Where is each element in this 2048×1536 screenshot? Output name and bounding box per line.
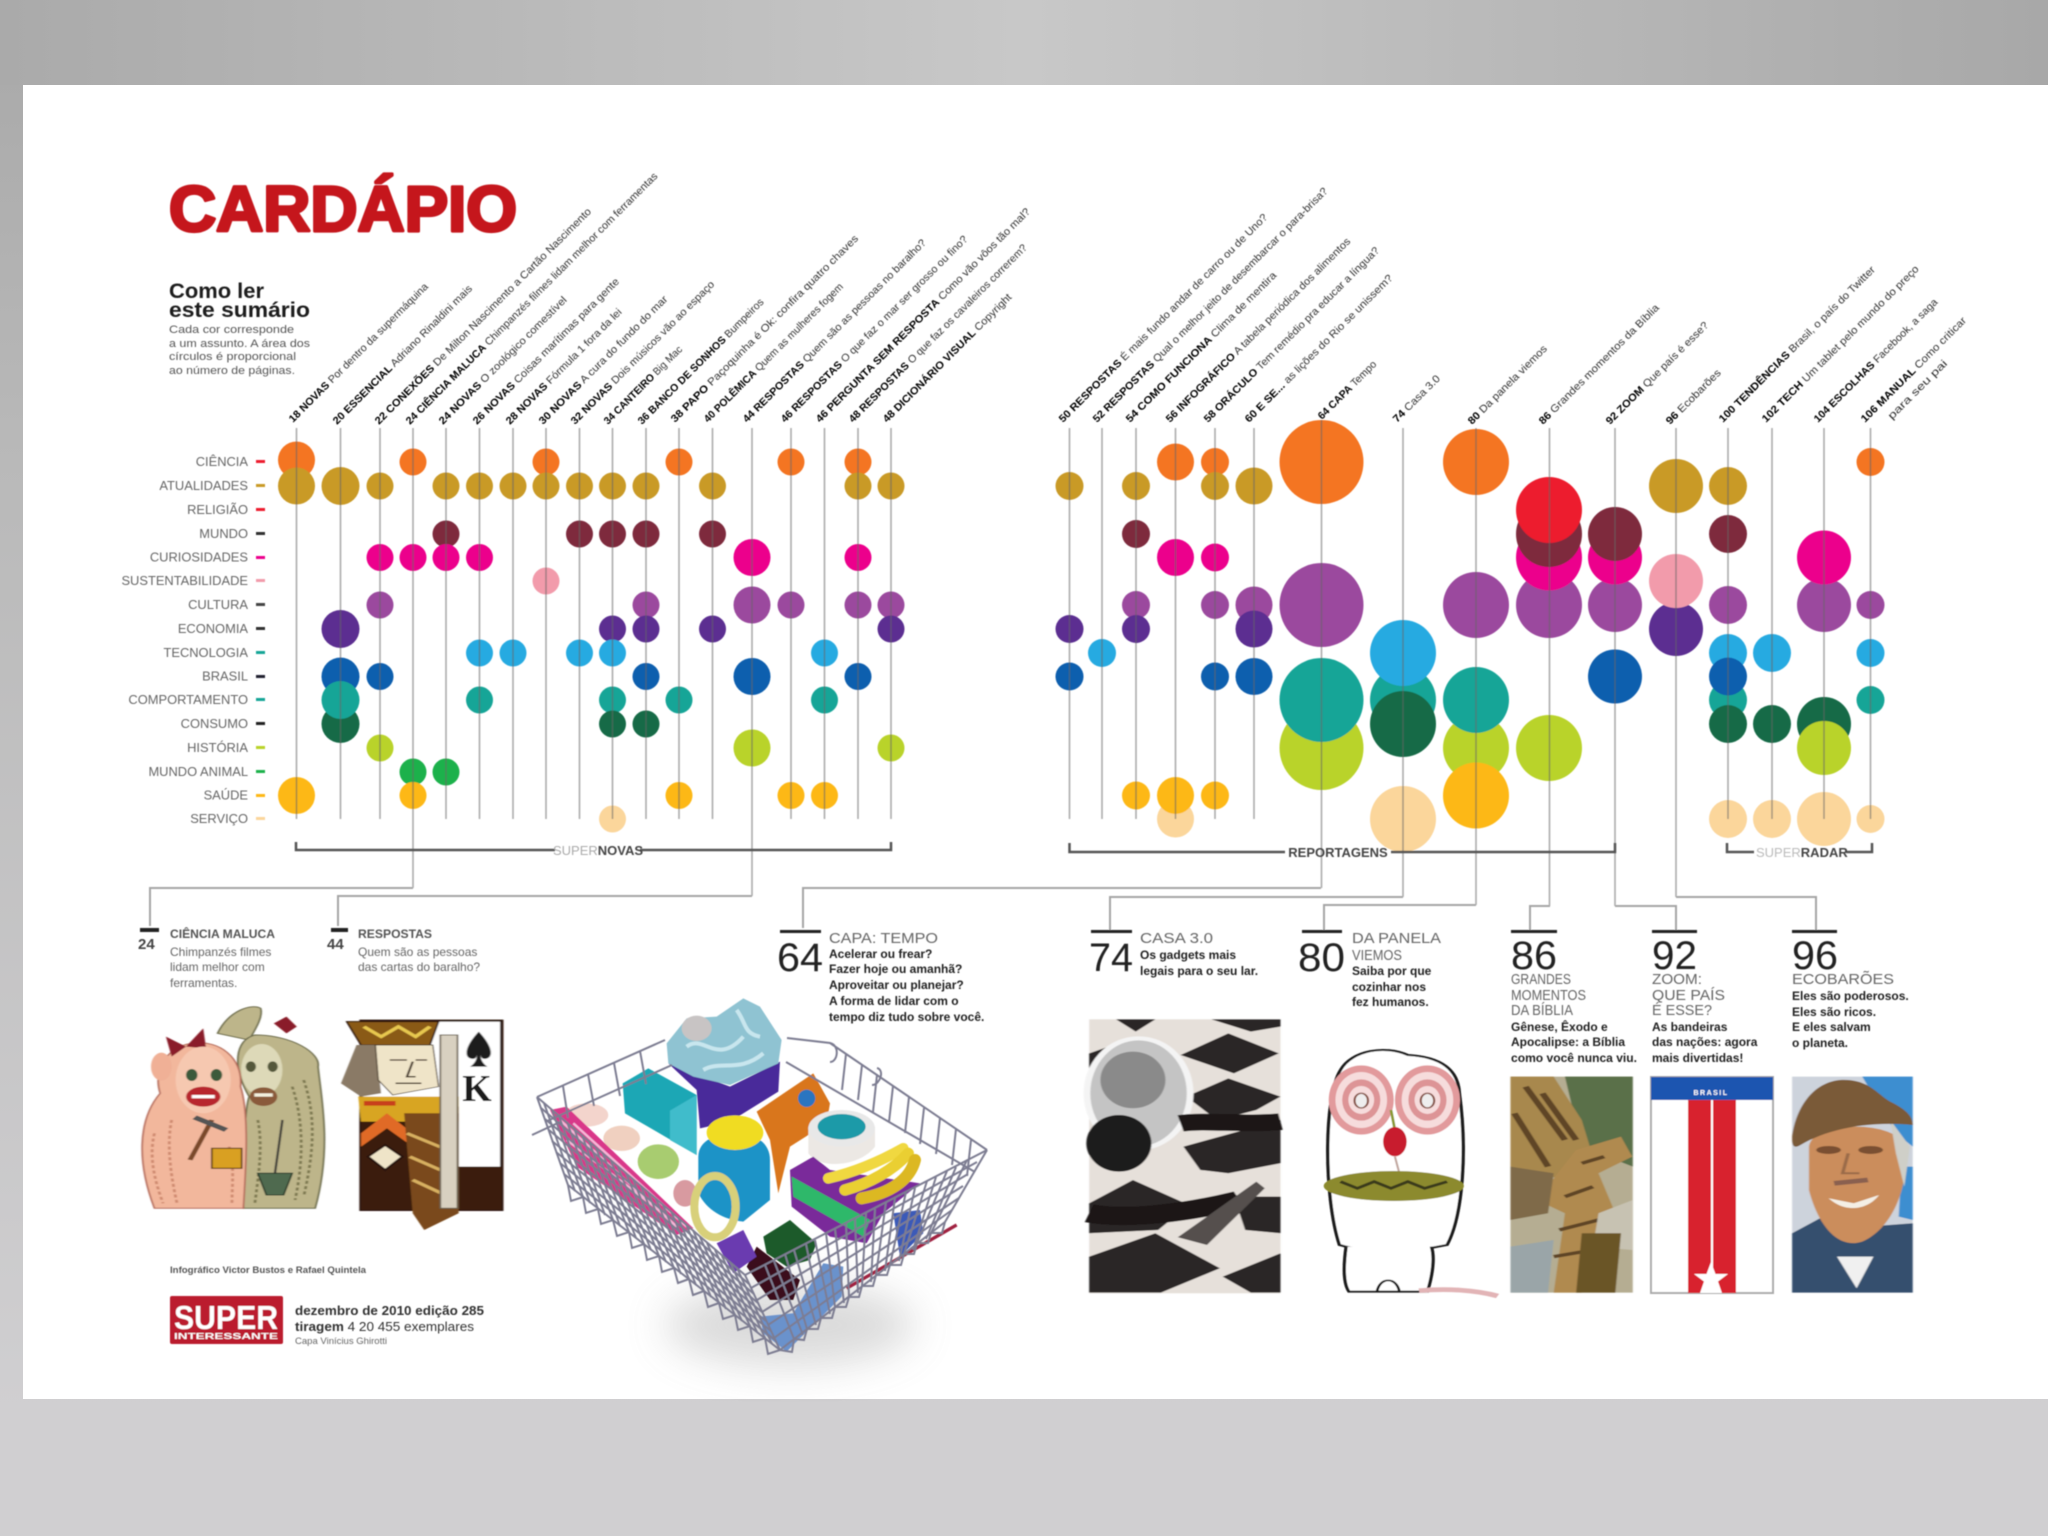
item: 96 ecobarões: 96 xyxy=(1792,934,1838,978)
row labels: subjects: SUSTENTABILIDADE xyxy=(121,573,248,588)
row labels: subjects: MUNDO xyxy=(199,526,248,541)
row labels: subjects: RELIGIÃO xyxy=(187,502,248,517)
column: 106 manual xyxy=(1856,314,1969,833)
column: 80 da panela xyxy=(1443,343,1550,905)
item: 24 ciência maluca xyxy=(138,928,275,990)
edition info: dezembro de 2010 edição 285 xyxy=(295,1304,484,1318)
row labels: subjects: ECONOMIA xyxy=(178,621,248,636)
page content xyxy=(121,170,1969,1367)
item: 74 casa xyxy=(1089,930,1258,980)
column: 46 pergunta sem resposta: 46 PERGUNTA SEM RESPOSTA Como vão vôos tão mal? xyxy=(814,206,1033,425)
column: 38 papo: 38 PAPO Paçoquinha é Ok: confira quatro chaves xyxy=(669,233,861,425)
item: 74 casa: legais para o seu lar. xyxy=(1140,964,1258,978)
item: 92 zoom: As bandeiras xyxy=(1652,1020,1728,1034)
column: 100 tendências: 100 TENDÊNCIAS Brasil, o país do Twitter xyxy=(1716,263,1878,425)
column: 104 escolhas xyxy=(1797,296,1940,846)
item: 86 bíblia xyxy=(1511,930,1637,1065)
column: 36 banco de sonhos xyxy=(632,296,766,819)
item: 86 bíblia: DA BÍBLIA xyxy=(1511,1002,1573,1019)
item: 92 zoom: É ESSE? xyxy=(1652,1002,1712,1019)
legend: how to read: Como ler xyxy=(169,280,264,303)
row labels: subjects: TECNOLOGIA xyxy=(163,645,248,660)
item: 96 ecobarões: ECOBARÕES xyxy=(1792,971,1894,988)
column: 48 dicionário visual: 48 DICIONÁRIO VISUAL Copyright xyxy=(880,291,1014,425)
column: 26 novas: 26 NOVAS Coisas marítimas para gente xyxy=(471,276,622,427)
item: 74 casa: Os gadgets mais xyxy=(1140,948,1236,962)
column: 22 conexões xyxy=(366,205,594,819)
item: 86 bíblia: Apocalipse: a Bíblia xyxy=(1511,1035,1625,1049)
column: 18 novas xyxy=(278,281,431,819)
item: 44 respostas: RESPOSTAS xyxy=(358,929,432,941)
column: 102 tech xyxy=(1753,263,1922,838)
item: 64 capa tempo: tempo diz tudo sobre você. xyxy=(829,1010,984,1024)
column: 102 tech: 102 TECH Um tablet pelo mundo do preço xyxy=(1760,263,1922,425)
column: 56 infográfico xyxy=(1157,235,1353,837)
illustration: shopping basket xyxy=(532,998,987,1367)
legend: how to read: Cada cor corresponde xyxy=(169,324,294,336)
column: 46 pergunta sem resposta xyxy=(811,206,1033,819)
illustration: monkeys xyxy=(142,1007,324,1208)
logo: super interessante: INTERESSANTE xyxy=(174,1332,279,1341)
column: 92 zoom xyxy=(1588,320,1711,906)
column: 48 respostas xyxy=(844,242,1030,819)
column: 80 da panela: 80 Da panela viemos xyxy=(1466,343,1550,427)
item: 24 ciência maluca: Chimpanzés filmes xyxy=(170,945,271,959)
item: 44 respostas xyxy=(327,928,480,974)
item: 96 ecobarões: E eles salvam xyxy=(1792,1020,1871,1034)
column: 60 e se: 60 E SE... as lições do Rio se unissem? xyxy=(1243,272,1395,425)
row labels: subjects: SERVIÇO xyxy=(190,811,248,826)
row labels: subjects: HISTÓRIA xyxy=(187,740,248,755)
bracket: reportagens: REPORTAGENS xyxy=(1288,845,1388,860)
column: 18 novas: 18 NOVAS Por dentro da supermáquina xyxy=(287,281,431,425)
row labels: subjects: CURIOSIDADES xyxy=(150,550,248,564)
row labels: subjects: CIÊNCIA xyxy=(196,454,248,469)
item: 92 zoom xyxy=(1652,930,1758,1065)
illustration: flag: BRASIL xyxy=(1693,1090,1729,1097)
column: 58 oráculo xyxy=(1201,244,1382,819)
item: 24 ciência maluca: lidam melhor com xyxy=(170,960,265,974)
row labels: subjects: MUNDO ANIMAL xyxy=(148,764,248,779)
column: 34 canteiro xyxy=(599,344,685,832)
column: 28 novas: 28 NOVAS Fórmula 1 fora da lei xyxy=(504,306,625,427)
column: 92 zoom: 92 ZOOM Que país é esse? xyxy=(1604,320,1711,427)
column: 60 e se xyxy=(1236,272,1395,819)
item: 24 ciência maluca: CIÊNCIA MALUCA xyxy=(170,928,275,941)
column: 106 manual: para seu pai xyxy=(1886,358,1950,422)
item: 80 da panela xyxy=(1298,930,1441,1009)
item: 92 zoom: mais divertidas! xyxy=(1652,1051,1743,1065)
basket mesh xyxy=(532,1038,987,1354)
item: 44 respostas: 44 xyxy=(327,936,344,953)
column: 54 como funciona: 54 COMO FUNCIONA Clima de mentira xyxy=(1124,269,1279,425)
column: 44 respostas: 44 RESPOSTAS Quem são as pessoas no baralho? xyxy=(741,237,929,425)
logo: super interessante: SUPER xyxy=(174,1299,278,1336)
column: 52 respostas xyxy=(1088,185,1330,819)
item: 92 zoom: 92 xyxy=(1652,934,1697,978)
bracket: super radar: SUPERRADAR xyxy=(1756,845,1848,860)
column: 50 respostas xyxy=(1056,211,1270,819)
item: 80 da panela: 80 xyxy=(1298,936,1345,980)
column: 64 capa: 64 CAPA Tempo xyxy=(1316,358,1379,422)
column: 32 novas: 32 NOVAS Dois músicos vão ao espaço xyxy=(569,279,717,427)
column: 36 banco de sonhos: 36 BANCO DE SONHOS Bumpeiros xyxy=(636,296,766,427)
column: 96 ecobarões: 96 Ecobarões xyxy=(1664,367,1724,427)
column: 86 bíblia: 86 Grandes momentos da Bíblia xyxy=(1537,302,1662,427)
illustration: flag xyxy=(1651,1077,1773,1293)
column: 24 novas xyxy=(432,294,570,819)
illustration: king of spades card: K xyxy=(462,1068,492,1110)
column: 86 bíblia xyxy=(1516,302,1662,906)
column: 32 novas xyxy=(566,279,717,819)
item: 64 capa tempo xyxy=(777,930,984,1024)
column: 64 capa xyxy=(1280,358,1379,888)
legend: how to read: este sumário xyxy=(169,299,310,322)
item: 92 zoom: ZOOM: xyxy=(1652,972,1702,988)
photo: checkerboard coffee machine xyxy=(1086,1019,1280,1293)
column: 30 novas xyxy=(532,293,671,819)
row labels: subjects: BRASIL xyxy=(202,668,248,684)
credit line: Infográfico Victor Bustos e Rafael Quintela xyxy=(170,1265,367,1275)
legend: how to read: a um assunto. A área dos xyxy=(169,338,311,350)
photo: eco baron portrait xyxy=(1792,1077,1913,1293)
item: 64 capa tempo: Fazer hoje ou amanhã? xyxy=(829,962,962,976)
item: 86 bíblia: GRANDES xyxy=(1511,972,1571,988)
column: 52 respostas: 52 RESPOSTAS Qual o melhor jeito de desembarcar o para-brisa? xyxy=(1091,185,1330,425)
item: 86 bíblia: como você nunca viu. xyxy=(1511,1051,1637,1065)
column: 20 essencial xyxy=(322,283,475,819)
connector lines xyxy=(150,888,1816,930)
item: 86 bíblia: Gênese, Êxodo e xyxy=(1511,1019,1608,1034)
column: 56 infográfico: 56 INFOGRÁFICO A tabela periódica dos alimentos xyxy=(1163,235,1353,425)
item: 80 da panela: fez humanos. xyxy=(1352,995,1429,1009)
legend: how to read xyxy=(169,280,311,377)
column: 106 manual: 106 MANUAL Como criticar xyxy=(1859,314,1969,425)
column: 58 oráculo: 58 ORÁCULO Tem remédio pra educar a língua? xyxy=(1201,244,1382,425)
illustration: king of spades card xyxy=(341,1021,502,1230)
item: 96 ecobarões xyxy=(1792,930,1909,1050)
item: 80 da panela: VIEMOS xyxy=(1352,948,1402,964)
item: 64 capa tempo: A forma de lidar com o xyxy=(829,994,959,1008)
item: 44 respostas: Quem são as pessoas xyxy=(358,945,477,959)
item: 74 casa: 74 xyxy=(1089,936,1133,980)
item: 64 capa tempo: 64 xyxy=(777,936,823,980)
column: 48 dicionário visual xyxy=(878,291,1014,819)
row labels: subjects: COMPORTAMENTO xyxy=(128,692,248,707)
column: 40 polêmica: 40 POLÊMICA Quem as mulheres fogem xyxy=(701,280,846,425)
item: 86 bíblia: 86 xyxy=(1511,934,1557,978)
column: 44 respostas xyxy=(734,237,929,896)
item: 96 ecobarões: Eles são ricos. xyxy=(1792,1005,1876,1019)
column: 20 essencial: 20 ESSENCIAL Adriano Rinaldini mais xyxy=(331,283,475,427)
item: 44 respostas: das cartas do baralho? xyxy=(358,960,480,974)
item: 74 casa: CASA 3.0 xyxy=(1140,931,1213,947)
column: 74 casa: 74 Casa 3.0 xyxy=(1391,373,1443,425)
column: 34 canteiro: 34 CANTEIRO Big Mac xyxy=(602,344,685,427)
bracket: super novas: SUPERNOVAS xyxy=(553,843,643,858)
item: 80 da panela: Saiba por que xyxy=(1352,964,1432,978)
bracket: super radar xyxy=(1727,843,1872,860)
item: 86 bíblia: MOMENTOS xyxy=(1511,988,1586,1004)
item: 64 capa tempo: Acelerar ou frear? xyxy=(829,947,932,961)
column: 50 respostas: 50 RESPOSTAS É mais fundo andar de carro ou de Uno? xyxy=(1056,211,1270,425)
item: 24 ciência maluca: 24 xyxy=(138,936,155,953)
column: 38 papo xyxy=(666,233,861,819)
column: 46 respostas: 46 RESPOSTAS O que faz o mar ser grosso ou fino? xyxy=(779,233,970,425)
column: 40 polêmica xyxy=(699,280,846,819)
column: 100 tendências xyxy=(1709,263,1878,838)
column: 22 conexões: 22 CONEXÕES De Milton Nascimento a Cartão Nascimento xyxy=(372,205,594,427)
row labels: subjects xyxy=(121,454,265,826)
bracket: super novas xyxy=(296,842,891,858)
item: 64 capa tempo: CAPA: TEMPO xyxy=(829,931,938,947)
column: 46 respostas xyxy=(778,233,970,819)
item: 24 ciência maluca: ferramentas. xyxy=(170,976,237,990)
item: 64 capa tempo: Aproveitar ou planejar? xyxy=(829,978,964,992)
column: 54 como funciona xyxy=(1122,269,1279,819)
edition info: tiragem 4 20 455 exemplares xyxy=(295,1320,474,1334)
column: 24 ciência maluca: 24 CIÊNCIA MALUCA Chimpanzés filmes lidam melhor com ferramentas xyxy=(403,170,660,427)
item: 92 zoom: das nações: agora xyxy=(1652,1035,1758,1049)
item: 92 zoom: QUE PAÍS xyxy=(1652,987,1725,1004)
bracket: reportagens xyxy=(1070,843,1615,860)
column: 26 novas xyxy=(466,276,622,819)
item: 96 ecobarões: o planeta. xyxy=(1792,1036,1848,1050)
column: 24 ciência maluca xyxy=(400,170,660,888)
item: 96 ecobarões: Eles são poderosos. xyxy=(1792,989,1909,1003)
column: 48 respostas: 48 RESPOSTAS O que faz os cavaleiros correrem? xyxy=(847,242,1030,425)
edition info: Capa Vinícius Ghirotti xyxy=(295,1336,387,1346)
title: CARDÁPIO xyxy=(169,173,517,245)
photo: bible painting xyxy=(1510,1077,1633,1293)
legend: how to read: ao número de páginas. xyxy=(169,365,295,377)
row labels: subjects: CULTURA xyxy=(188,597,248,612)
row labels: subjects: SAÚDE xyxy=(204,788,248,802)
column: 104 escolhas: 104 ESCOLHAS Facebook, a saga xyxy=(1812,296,1940,425)
column: 28 novas xyxy=(500,306,625,819)
row labels: subjects: CONSUMO xyxy=(181,716,248,731)
row labels: subjects: ATUALIDADES xyxy=(159,478,248,493)
edition info xyxy=(295,1304,484,1346)
item: 80 da panela: cozinhar nos xyxy=(1352,980,1426,994)
legend: how to read: círculos é proporcional xyxy=(169,351,296,363)
column: 74 casa xyxy=(1370,373,1443,897)
illustration: food face character xyxy=(1324,1050,1498,1296)
column: 24 novas: 24 NOVAS O zoológico comestível xyxy=(437,294,570,427)
column: 30 novas: 30 NOVAS A cura do fundo do mar xyxy=(537,293,671,427)
column: 96 ecobarões xyxy=(1649,367,1724,897)
item: 80 da panela: DA PANELA xyxy=(1352,931,1441,947)
background: top band xyxy=(0,0,2048,85)
